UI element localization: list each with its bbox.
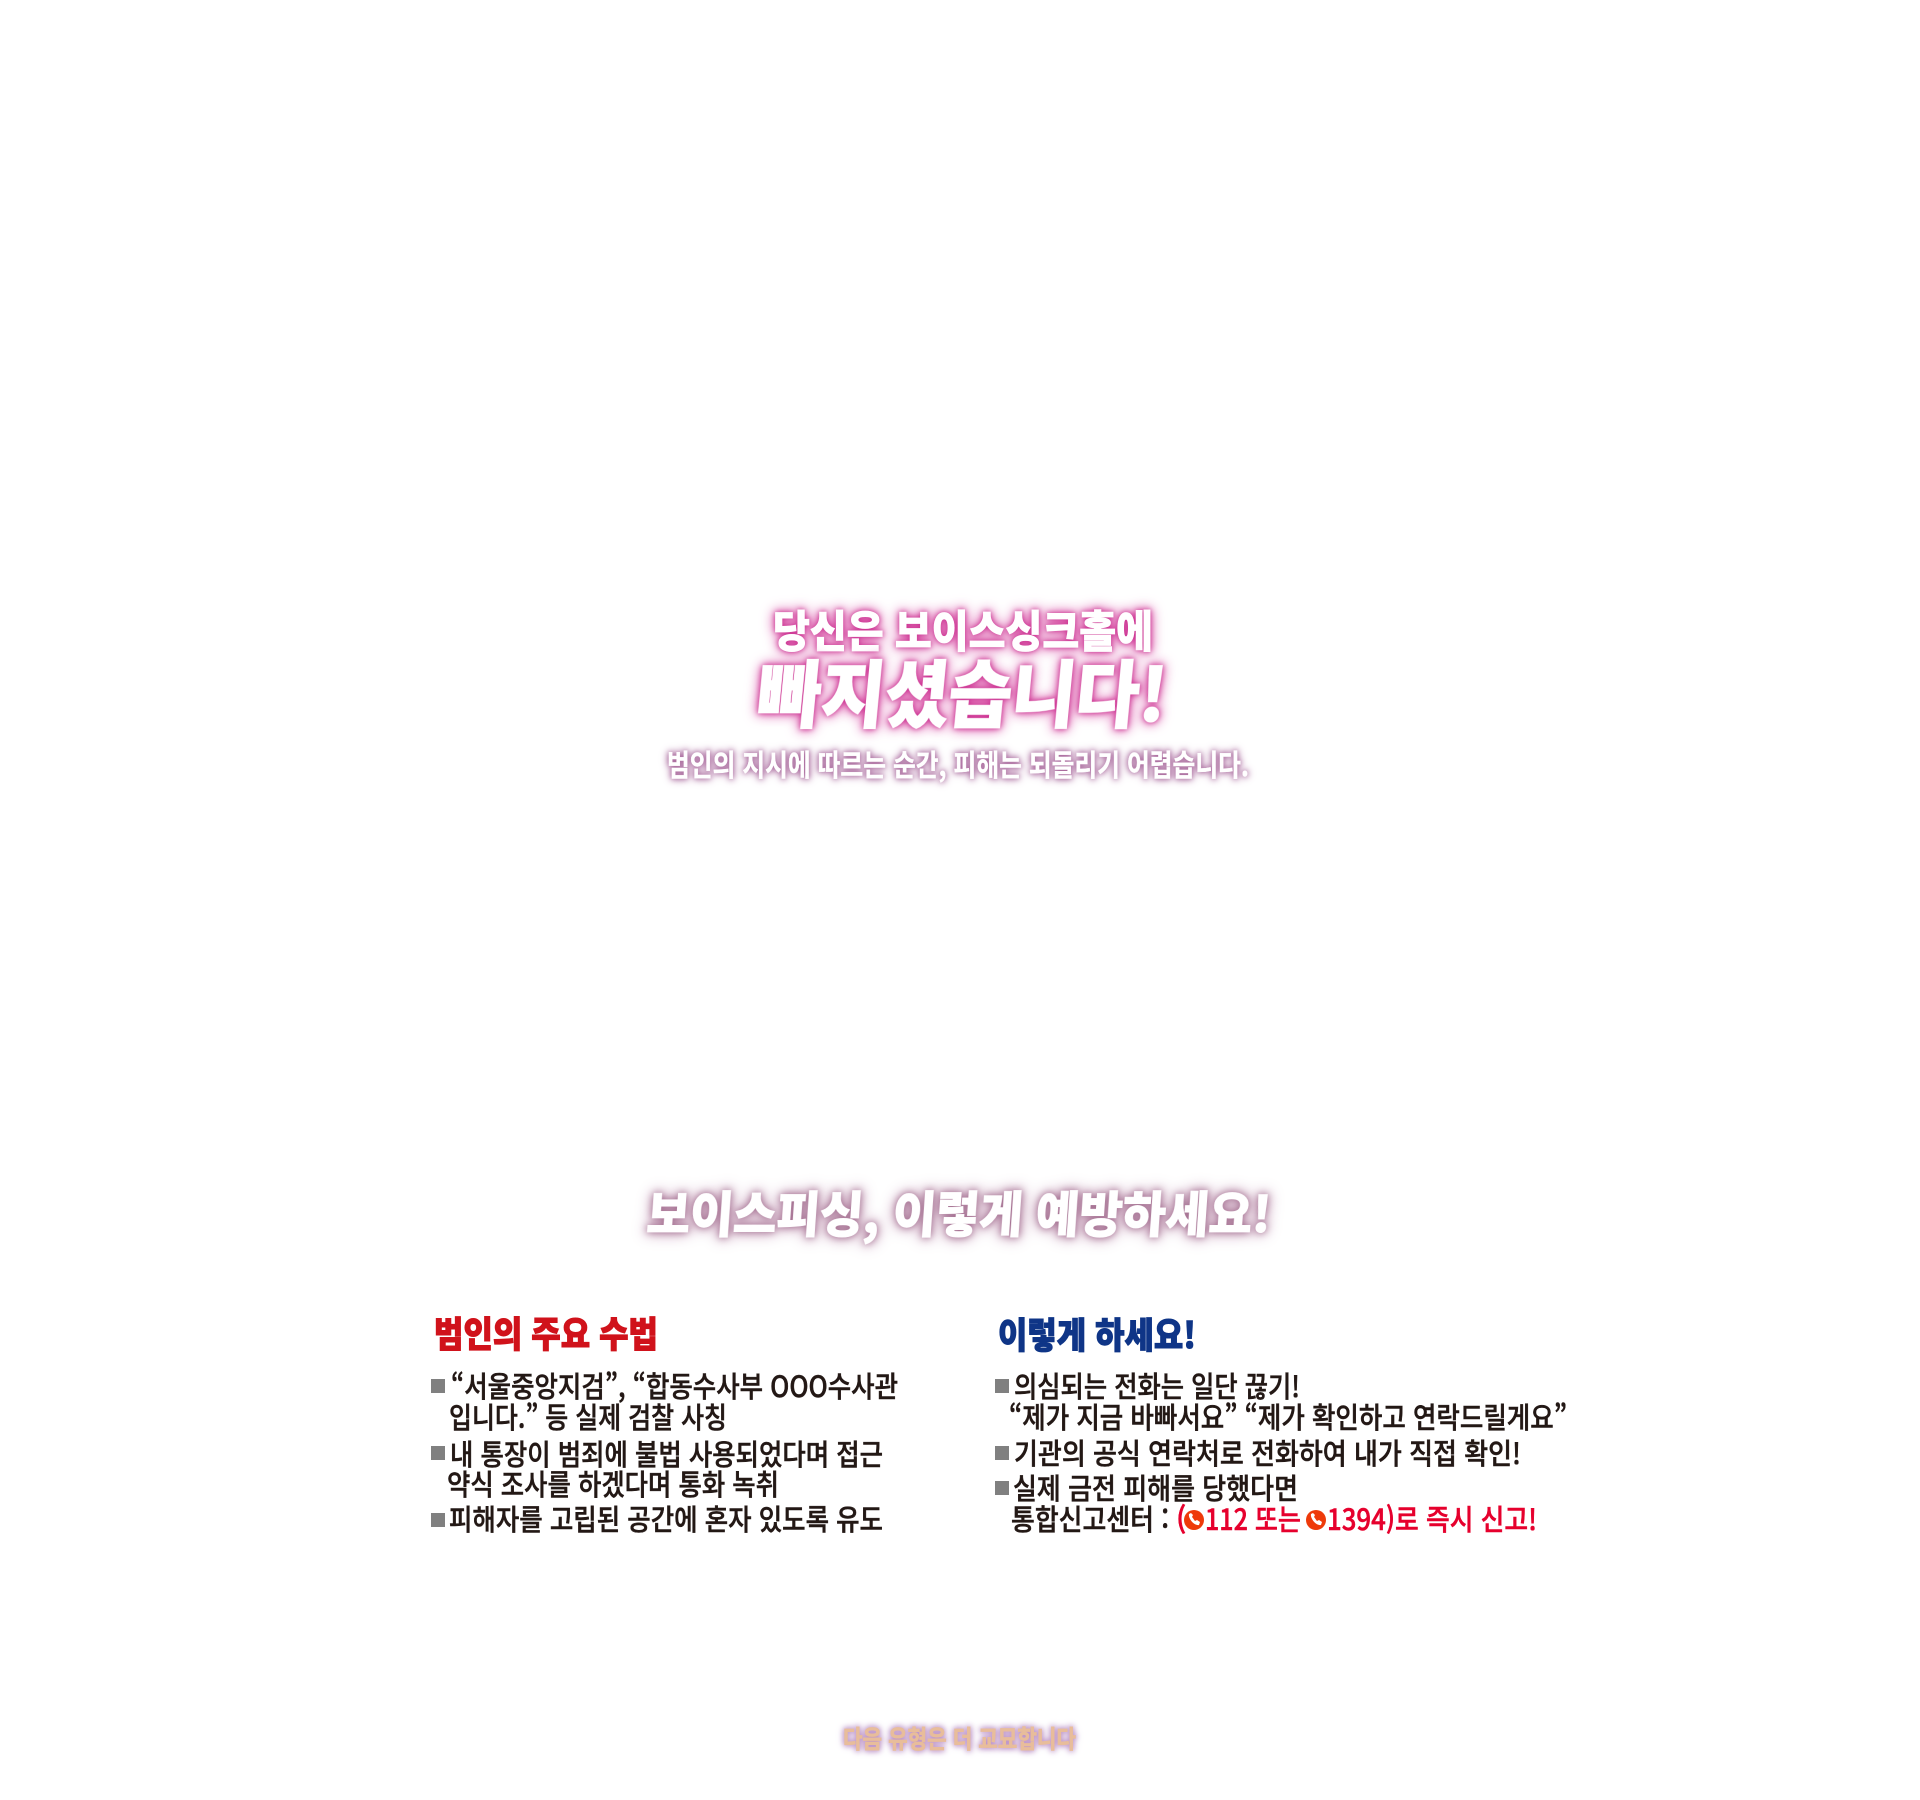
footer teaser: 다음 유형은 더 교묘합니다 xyxy=(843,1720,1076,1756)
bullet 1 xyxy=(431,1364,898,1437)
bullet 1: 입니다.” 등 실제 검찰 사칭 xyxy=(449,1395,727,1437)
bullet 2: 약식 조사를 하겠다며 통화 녹취 xyxy=(447,1462,779,1504)
headline line 1: 당신은 보이스싱크홀에 xyxy=(773,596,1153,660)
icon: phone xyxy=(1184,1510,1204,1530)
bullet 2 xyxy=(431,1432,883,1504)
heading: criminal methods: 범인의 주요 수법 xyxy=(434,1306,658,1358)
headline line 2: 빠지셨습니다! xyxy=(753,637,1173,743)
heading: what to do: 이렇게 하세요! xyxy=(998,1307,1196,1359)
advice 1 xyxy=(995,1364,1567,1437)
advice 3: 실제 금전 피해를 당했다면 xyxy=(1013,1466,1298,1508)
advice 1: 의심되는 전화는 일단 끊기! xyxy=(1014,1364,1300,1406)
advice 3: ( xyxy=(1176,1497,1186,1539)
advice 3: 1394)로 즉시 신고! xyxy=(1327,1497,1537,1539)
advice 3 xyxy=(995,1466,1537,1539)
bullet 2: 내 통장이 범죄에 불법 사용되었다며 접근 xyxy=(450,1432,883,1474)
section heading: prevention: 보이스피싱, 이렇게 예방하세요! xyxy=(645,1176,1274,1247)
panel: what to do xyxy=(995,1307,1567,1539)
advice 3: 112 또는 xyxy=(1205,1497,1301,1539)
advice 1: “제가 지금 바빠서요” “제가 확인하고 연락드릴게요” xyxy=(1009,1395,1567,1437)
title: sinkhole headline xyxy=(753,596,1173,743)
bullet 3: 피해자를 고립된 공간에 혼자 있도록 유도 xyxy=(449,1497,883,1539)
icon: phone xyxy=(1306,1510,1326,1530)
advice 3: 통합신고센터 : xyxy=(1011,1497,1169,1539)
bullet 1: “서울중앙지검”, “합동수사부 OOO수사관 xyxy=(451,1364,898,1406)
panel: criminal methods xyxy=(431,1306,898,1539)
subtitle: 범인의 지시에 따르는 순간, 피해는 되돌리기 어렵습니다. xyxy=(667,741,1249,785)
advice 2: 기관의 공식 연락처로 전화하여 내가 직접 확인! xyxy=(1014,1431,1521,1473)
